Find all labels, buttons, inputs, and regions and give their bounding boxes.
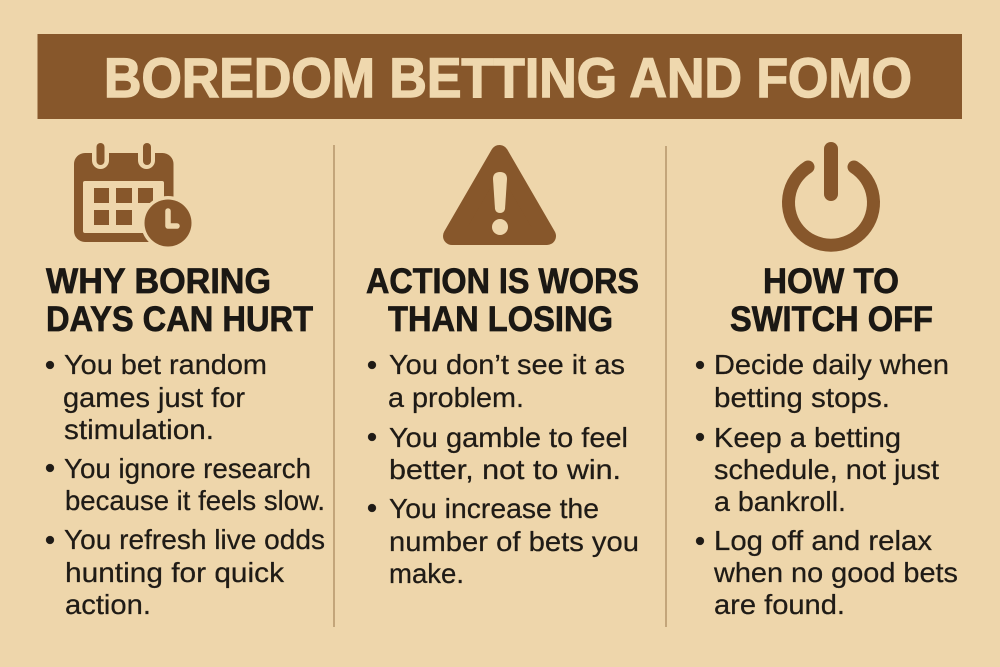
heading: how to switch off (730, 262, 933, 339)
bullet list: why boring days: You refresh live odds (64, 524, 325, 555)
bullet list: switch off (696, 349, 958, 620)
title banner (38, 34, 962, 119)
bullet list: switch off: Log off and relax (714, 525, 932, 556)
heading: why boring days can hurt (46, 262, 313, 339)
bullet list: why boring days: games just for (63, 382, 245, 413)
bullet list: switch off: schedule, not just (714, 454, 939, 485)
icon: power symbol (788, 149, 874, 245)
bullet list: why boring days: hunting for quick (65, 557, 285, 588)
bullet list: switch off: Keep a betting (714, 422, 901, 453)
heading: how to switch off: HOW TO (763, 262, 899, 301)
bullet list: switch off: a bankroll. (714, 486, 846, 517)
bullet list: why boring days: You bet random (64, 349, 267, 380)
bullet list: action: make. (389, 558, 464, 589)
bullet list: switch off: when no good bets (713, 557, 958, 588)
bullet list: action: better, not to win. (389, 454, 621, 485)
bullet list: action: You don’t see it as (389, 349, 625, 380)
bullet list: why boring days: stimulation. (64, 414, 214, 445)
icon: warning triangle (452, 154, 547, 236)
title banner: BOREDOM BETTING AND FOMO (104, 46, 912, 109)
heading: why boring days can hurt: WHY BORING (46, 262, 271, 301)
bullet list: switch off: betting stops. (714, 382, 890, 413)
heading: action is wors than losing: ACTION IS WORS (366, 262, 639, 301)
heading: why boring days can hurt: DAYS CAN HURT (46, 300, 313, 339)
bullet list: switch off: Decide daily when (714, 349, 949, 380)
heading: action is wors than losing: THAN LOSING (388, 300, 613, 339)
heading: action is wors than losing (366, 262, 639, 339)
bullet list: why boring days: because it feels slow. (65, 485, 325, 516)
bullet list: why boring days: You ignore research (64, 453, 311, 484)
bullet list: action: a problem. (388, 382, 524, 413)
heading: how to switch off: SWITCH OFF (730, 300, 933, 339)
bullet list: why boring days (46, 349, 325, 620)
bullet list: action: You increase the (389, 493, 599, 524)
bullet list: action: number of bets you (389, 526, 639, 557)
icon: calendar with clock (74, 140, 195, 250)
panel: action is worse than losing (366, 154, 639, 589)
bullet list: why boring days: action. (65, 589, 151, 620)
panel: why boring days can hurt (46, 140, 325, 620)
bullet list: switch off: are found. (714, 589, 845, 620)
bullet list: action: You gamble to feel (389, 422, 628, 453)
bullet list: action (368, 349, 639, 589)
panel: how to switch off (696, 149, 958, 620)
